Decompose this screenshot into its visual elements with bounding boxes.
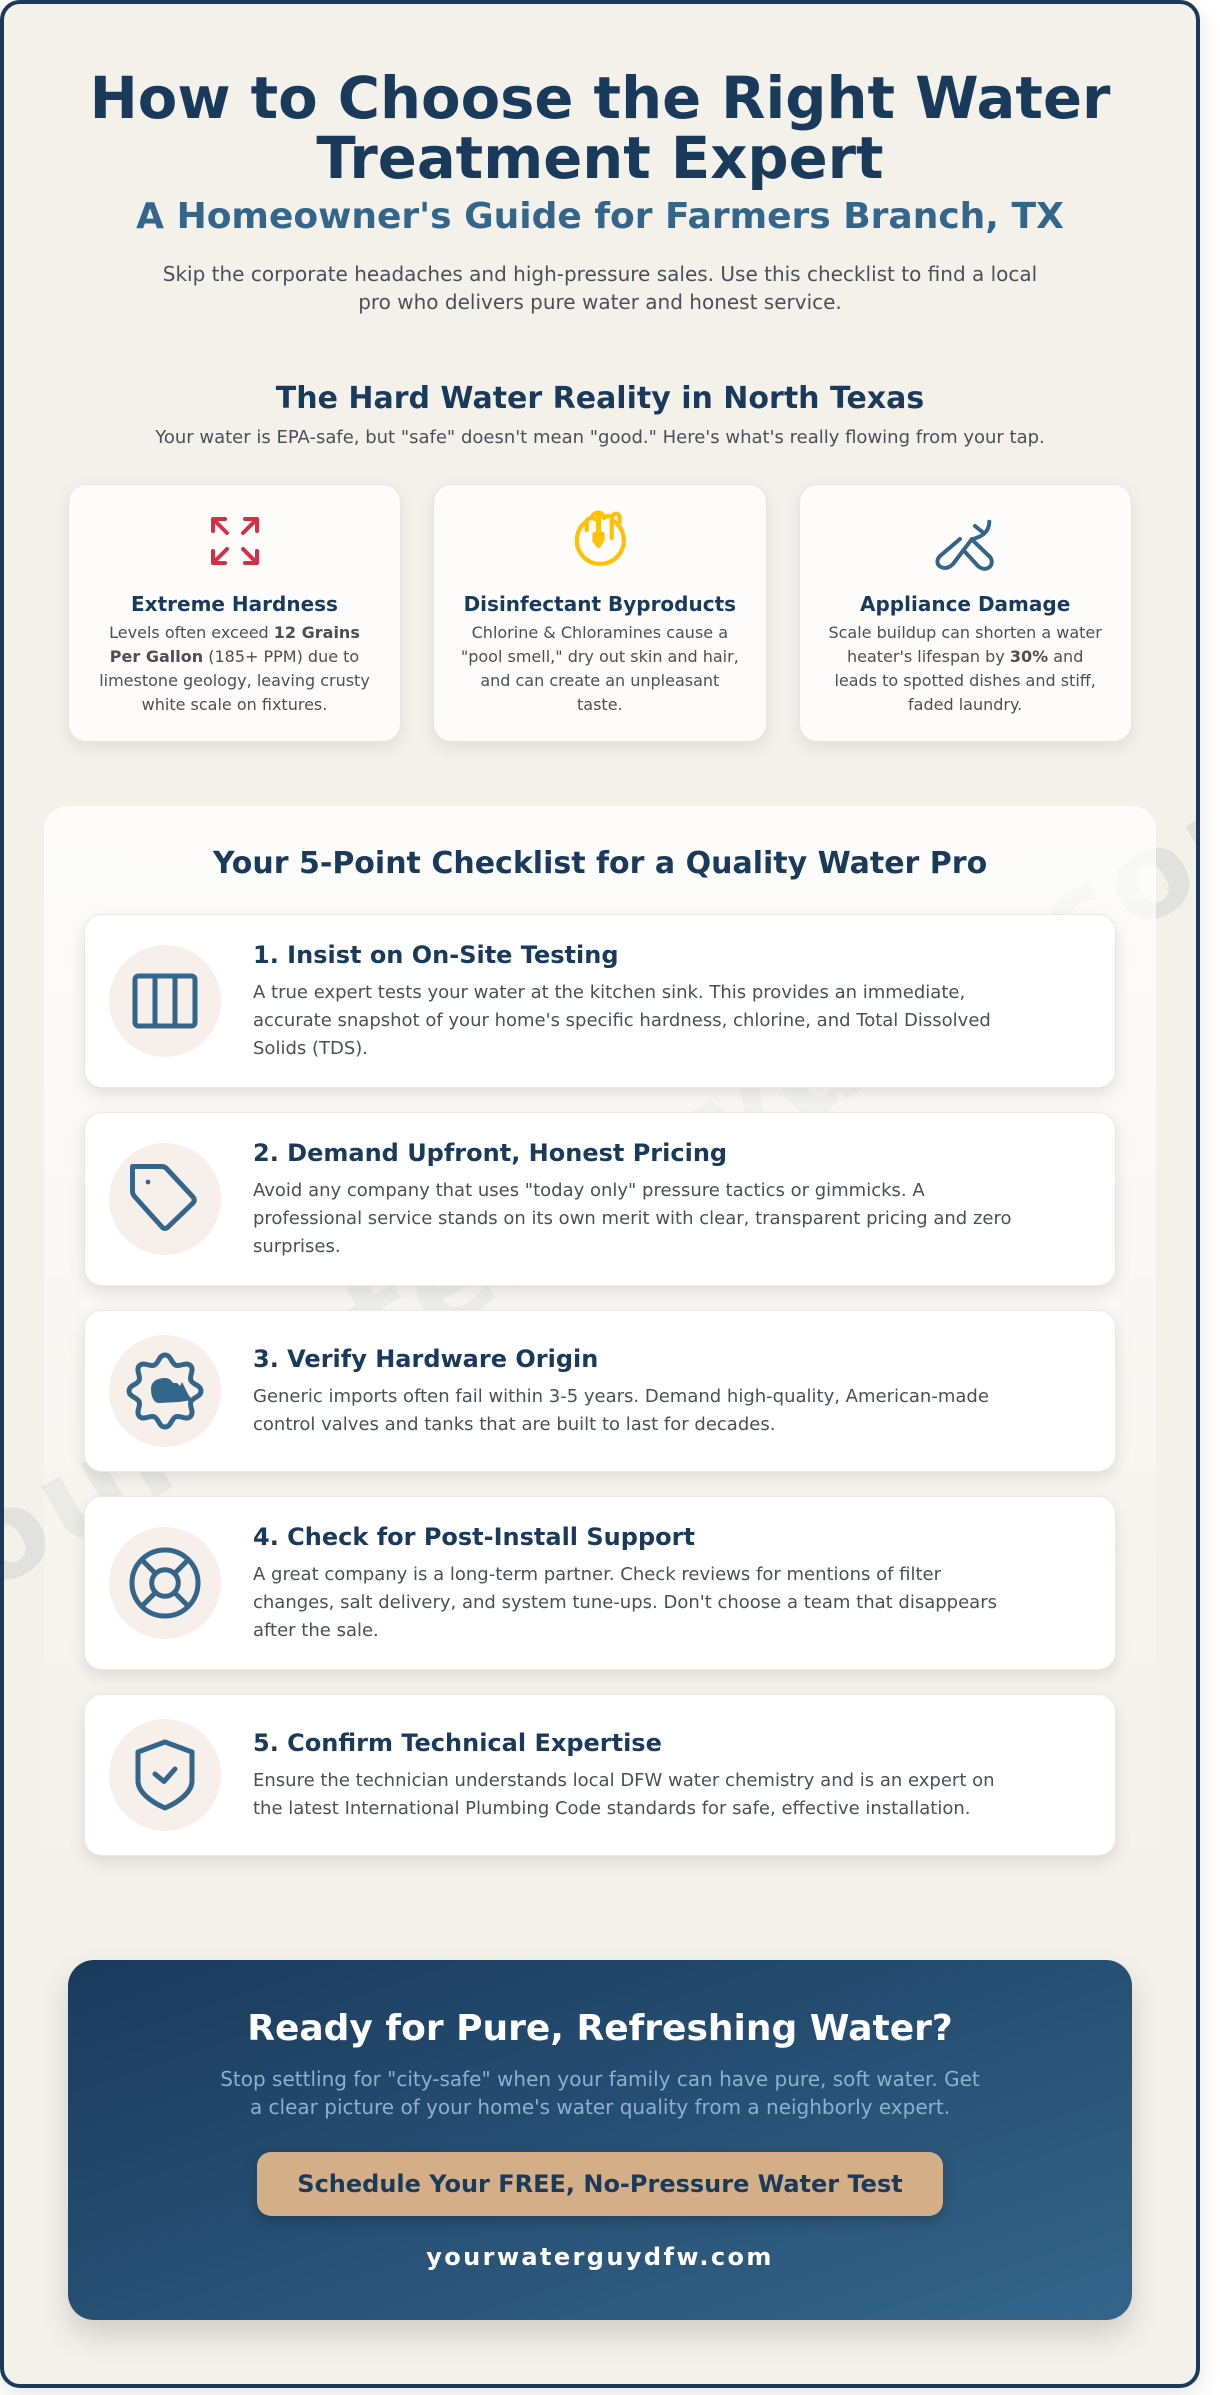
card text: Chlorine & Chloramines cause a xyxy=(472,623,728,642)
intro text xyxy=(163,262,1037,314)
title: How to Choose the Right Water xyxy=(90,65,1110,132)
panel: appliance damage xyxy=(799,484,1132,742)
CTA heading: Ready for Pure, Refreshing Water? xyxy=(247,2008,953,2049)
item text: changes, salt delivery, and system tune-ups. Don't choose a team that disappears xyxy=(253,1592,997,1613)
card text: taste. xyxy=(577,695,623,714)
checklist item 1 xyxy=(84,914,1116,1088)
item text: 4. Check for Post-Install Support xyxy=(253,1523,695,1551)
item text: Avoid any company that uses "today only" pressure tactics or gimmicks. A xyxy=(253,1180,925,1201)
card heading: Disinfectant Byproducts xyxy=(464,592,736,616)
checklist item 3 xyxy=(84,1310,1116,1472)
title: Treatment Expert xyxy=(316,125,884,192)
item text: 3. Verify Hardware Origin xyxy=(253,1345,598,1373)
item text: 1. Insist on On-Site Testing xyxy=(253,941,619,969)
header xyxy=(90,65,1110,314)
card text: and can create an unpleasant xyxy=(480,671,719,690)
intro text: Skip the corporate headaches and high-pressure sales. Use this checklist to find a local xyxy=(163,262,1037,286)
card text: "pool smell," dry out skin and hair, xyxy=(461,647,739,666)
icon: expanding arrows xyxy=(210,516,260,566)
card text: Per Gallon (185+ PPM) due to xyxy=(110,647,359,666)
checklist item 4 xyxy=(84,1496,1116,1670)
subtitle: A Homeowner's Guide for Farmers Branch, TX xyxy=(136,196,1064,237)
CTA text: Stop settling for "city-safe" when your family can have pure, soft water. Get xyxy=(220,2067,980,2091)
card text: limestone geology, leaving crusty xyxy=(99,671,370,690)
item text: after the sale. xyxy=(253,1620,379,1641)
section intro: Your water is EPA-safe, but "safe" doesn't mean "good." Here's what's really flowing from your tap. xyxy=(155,427,1045,448)
card text: heater's lifespan by 30% and xyxy=(847,647,1083,666)
icon: lifebuoy xyxy=(109,1527,221,1639)
panel: extreme hardness xyxy=(68,484,401,742)
checklist heading: Your 5-Point Checklist for a Quality Water Pro xyxy=(213,846,987,881)
item text xyxy=(253,941,991,1059)
icon: test columns xyxy=(109,945,221,1057)
CTA button xyxy=(257,2152,943,2216)
item text: professional service stands on its own merit with clear, transparent pricing and zero xyxy=(253,1208,1012,1229)
card text xyxy=(99,623,370,714)
item text xyxy=(253,1139,1012,1257)
section heading: hard water reality: The Hard Water Reality in North Texas xyxy=(276,381,924,416)
panel: call to action xyxy=(68,1960,1132,2320)
card text: Scale buildup can shorten a water xyxy=(828,623,1102,642)
checklist item 5 xyxy=(84,1694,1116,1856)
panel: checklist background xyxy=(44,806,1156,1896)
card heading: Extreme Hardness xyxy=(131,592,338,616)
card text xyxy=(828,623,1102,714)
card text xyxy=(461,623,739,714)
item text: the latest International Plumbing Code standards for safe, effective installation. xyxy=(253,1798,971,1819)
CTA button: Schedule Your FREE, No-Pressure Water Test xyxy=(297,2170,903,2198)
item text: Solids (TDS). xyxy=(253,1038,368,1059)
item text: control valves and tanks that are built to last for decades. xyxy=(253,1414,775,1435)
item text: 2. Demand Upfront, Honest Pricing xyxy=(253,1139,727,1167)
CTA text xyxy=(220,2067,980,2119)
panel: disinfectant byproducts xyxy=(433,484,767,742)
card heading: Appliance Damage xyxy=(860,592,1070,616)
item text: Ensure the technician understands local DFW water chemistry and is an expert on xyxy=(253,1770,995,1791)
card text: leads to spotted dishes and stiff, xyxy=(834,671,1096,690)
icon: yellow disinfectant hand xyxy=(574,510,626,566)
item text: A great company is a long-term partner. Check reviews for mentions of filter xyxy=(253,1564,941,1585)
item text: surprises. xyxy=(253,1236,341,1257)
icon: gear xyxy=(109,1335,221,1447)
item text xyxy=(253,1523,997,1641)
icon: shield check xyxy=(109,1719,221,1831)
card text: faded laundry. xyxy=(908,695,1022,714)
checklist item 2 xyxy=(84,1112,1116,1286)
item text: Generic imports often fail within 3-5 years. Demand high-quality, American-made xyxy=(253,1386,989,1407)
card text: Levels often exceed 12 Grains xyxy=(109,623,360,642)
intro text: pro who delivers pure water and honest service. xyxy=(358,290,842,314)
item text: accurate snapshot of your home's specific hardness, chlorine, and Total Dissolved xyxy=(253,1010,991,1031)
icon: wrench and tool xyxy=(936,520,994,571)
title xyxy=(90,65,1110,192)
CTA text: a clear picture of your home's water quality from a neighborly expert. xyxy=(250,2095,950,2119)
item text: 5. Confirm Technical Expertise xyxy=(253,1729,662,1757)
icon: price tag xyxy=(109,1143,221,1255)
item text xyxy=(253,1345,989,1435)
card text: white scale on fixtures. xyxy=(142,695,327,714)
item text: A true expert tests your water at the kitchen sink. This provides an immediate, xyxy=(253,982,965,1003)
website link: yourwaterguydfw.com xyxy=(426,2243,774,2271)
item text xyxy=(253,1729,995,1819)
